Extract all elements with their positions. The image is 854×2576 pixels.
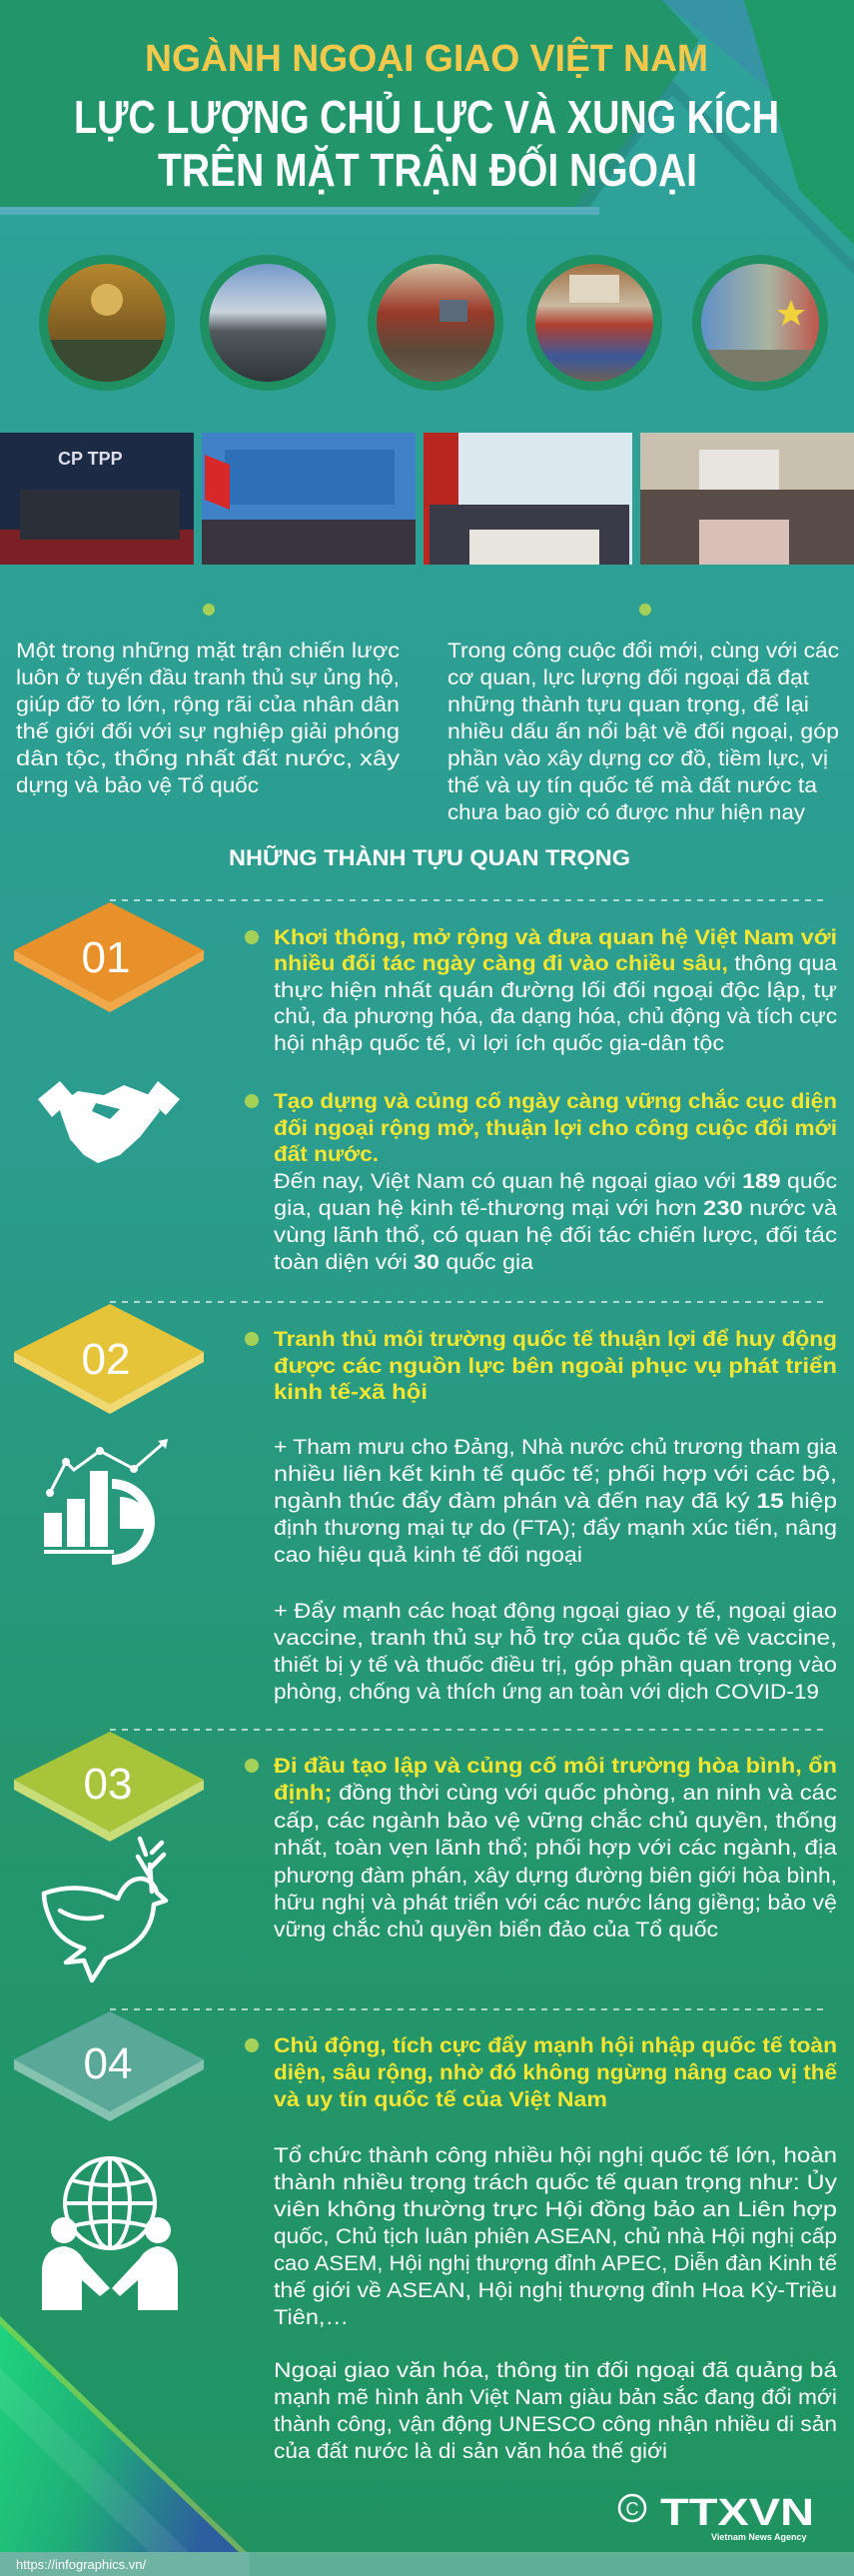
section 2 text: được các nguồn lực bên ngoài phục vụ phát triển	[274, 1355, 837, 1378]
icon: globe with people	[42, 2158, 178, 2310]
badge 01	[14, 902, 204, 1012]
section 1 text: nhiều đối tác ngày càng đi vào chiều sâu, thông qua	[274, 952, 837, 975]
section 1 text: Đến nay, Việt Nam có quan hệ ngoại giao với 189 quốc	[274, 1170, 837, 1193]
section 4 text: Chủ động, tích cực đẩy mạnh hội nhập quốc tế toàn	[274, 2034, 837, 2057]
section 2 text: kinh tế-xã hội	[274, 1381, 427, 1404]
section 3 text: nhất, toàn vẹn lãnh thổ; phối hợp với các ngành, địa	[274, 1837, 837, 1860]
section 1 text: thực hiện nhất quán đường lối đối ngoại độc lập, tự	[274, 979, 837, 1002]
section heading: NHỮNG THÀNH TỰU QUAN TRỌNG	[229, 845, 630, 870]
section 4 text: Tổ chức thành công nhiều hội nghị quốc tế lớn, hoàn	[274, 2144, 837, 2167]
section 4 text: Tiên,…	[274, 2306, 349, 2329]
section 2 text: phòng, chống và thích ứng an toàn với dịch COVID-19	[274, 1681, 819, 1704]
intro dots	[203, 604, 651, 616]
section 2 text: nhiều liên kết kinh tế quốc tế; phối hợp với các bộ,	[274, 1463, 837, 1486]
section 4 text	[245, 2034, 838, 2463]
section 4 text: thành công, vận động UNESCO công nhận nhiều di sản	[274, 2413, 837, 2436]
icon: chart	[44, 1439, 168, 1565]
section 1 text: gia, quan hệ kinh tế-thương mại với hơn 230 nước và	[274, 1197, 837, 1220]
section 1 text: hội nhập quốc tế, vì lợi ích quốc gia-dân tộc	[274, 1032, 724, 1055]
section 2 text: cao hiệu quả kinh tế đối ngoại	[274, 1544, 582, 1567]
section 1 text: Tạo dựng và củng cố ngày càng vững chắc cục diện	[274, 1089, 837, 1113]
section 3 text: phương đàm phán, xây dựng đường biên giới hòa bình,	[274, 1865, 837, 1888]
section 3 text: hữu nghị và phát triển với các nước láng giềng; bảo vệ	[274, 1892, 837, 1915]
section 3 text: vững chắc chủ quyền biển đảo của Tổ quốc	[274, 1919, 718, 1941]
section 3 text: định; đồng thời cùng với quốc phòng, an ninh và các	[274, 1782, 837, 1805]
footer url bar: https://infographics.vn/	[16, 2557, 146, 2572]
section 2 text: + Tham mưu cho Đảng, Nhà nước chủ trương tham gia	[274, 1436, 837, 1459]
section 1 text: chủ, đa phương hóa, đa dạng hóa, chủ động và tích cực	[274, 1005, 837, 1028]
intro right text: chưa bao giờ có được như hiện nay	[447, 801, 806, 824]
section 1 text: đối ngoại rộng mở, thuận lợi cho công cuộc đổi mới	[274, 1117, 837, 1140]
intro left text: giúp đỡ to lớn, rộng rãi của nhân dân	[16, 693, 400, 716]
section 4 text: cao ASEM, Hội nghị thượng đỉnh APEC, Diễn đàn Kinh tế	[274, 2252, 837, 2275]
section 2 text: ngành thúc đẩy đàm phán và đến nay đã ký 15 hiệp	[274, 1490, 837, 1513]
section 4 text: của đất nước là di sản văn hóa thế giới	[274, 2440, 667, 2463]
section 1 text	[245, 926, 837, 1274]
intro right text: Trong công cuộc đổi mới, cùng với các	[447, 640, 839, 662]
intro left text: Một trong những mặt trận chiến lược	[16, 640, 400, 662]
section 4 text: thế giới về ASEAN, Hội nghị thượng đỉnh Hoa Kỳ-Triều	[274, 2279, 837, 2302]
section 2 text	[245, 1328, 837, 1704]
section 4 text: quốc, Chủ tịch luân phiên ASEAN, chủ nhà Hội nghị cấp	[274, 2225, 837, 2248]
section 2 text: Tranh thủ môi trường quốc tế thuận lợi để huy động	[274, 1328, 837, 1351]
photo strip	[0, 433, 854, 565]
intro left text: dựng và bảo vệ Tổ quốc	[16, 774, 259, 797]
intro right text: những thành tựu quan trọng, để lại	[447, 693, 809, 716]
section 4 text: thành nhiều trọng trách quốc tế quan trọng như: Ủy	[274, 2170, 838, 2194]
section 4 text: và uy tín quốc tế của Việt Nam	[274, 2088, 607, 2111]
footer url bar	[0, 2552, 854, 2576]
intro right text	[447, 640, 839, 824]
header background	[0, 0, 854, 275]
logo: TTXVN: C	[625, 2499, 639, 2519]
badge 02: 02	[82, 1335, 130, 1384]
section 1 text: vùng lãnh thổ, có quan hệ đối tác chiến lược, đối tác	[274, 1224, 837, 1247]
intro right text: thế và uy tín quốc tế mà đất nước ta	[447, 774, 817, 797]
photo circles row	[39, 255, 839, 391]
section 2 text: thiết bị y tế và thuốc điều trị, góp phần quan trọng vào	[274, 1654, 837, 1677]
section 4 text: Ngoại giao văn hóa, thông tin đối ngoại đã quảng bá	[274, 2359, 837, 2382]
intro left text: dân tộc, thống nhất đất nước, xây	[16, 747, 401, 770]
badge 03	[14, 1732, 204, 1842]
section 1 text: đất nước.	[274, 1143, 379, 1166]
intro right text: nhiều dấu ấn nổi bật về đối ngoại, góp	[447, 720, 839, 743]
intro right text: cơ quan, lực lượng đối ngoại đã đạt	[447, 666, 809, 689]
section 1 text: Khơi thông, mở rộng và đưa quan hệ Việt Nam với	[274, 926, 837, 949]
photo strip: CP TPP	[58, 449, 123, 469]
intro left text: thế giới đối với sự nghiệp giải phóng	[16, 720, 400, 743]
badge 04	[14, 2011, 204, 2121]
logo: TTXVN: Vietnam News Agency	[711, 2532, 807, 2542]
section 2 text: + Đẩy mạnh các hoạt động ngoại giao y tế, ngoại giao	[274, 1600, 837, 1623]
section 3 text	[245, 1755, 837, 1941]
section 3 text: Đi đầu tạo lập và củng cố môi trường hòa bình, ổn	[274, 1755, 837, 1778]
section 3 text: cấp, các ngành bảo vệ vững chắc chủ quyền, thống	[274, 1810, 837, 1833]
section 2 text: định thương mại tự do (FTA); đẩy mạnh xúc tiến, nâng	[274, 1517, 837, 1540]
title: NGÀNH NGOẠI GIAO VIỆT NAM	[145, 36, 708, 80]
intro right text: phần vào xây dựng cơ đồ, tiềm lực, vị	[447, 747, 828, 770]
icon: dove	[44, 1839, 166, 1980]
title: TRÊN MẶT TRẬN ĐỐI NGOẠI	[158, 144, 697, 196]
badge 02	[14, 1304, 204, 1414]
logo: TTXVN: TTXVN	[660, 2492, 814, 2534]
icon: handshake	[38, 1081, 180, 1163]
section 4 text: diện, sâu rộng, nhờ đó không ngừng nâng cao vị thế	[274, 2061, 837, 2084]
badge 04: 04	[84, 2039, 132, 2088]
section 2 text: vaccine, tranh thủ sự hỗ trợ của quốc tế về vaccine,	[274, 1627, 837, 1650]
section 4 text: viên không thường trực Hội đồng bảo an Liên hợp	[274, 2198, 837, 2221]
title	[74, 36, 779, 196]
section 4 text: mạnh mẽ hình ảnh Việt Nam giàu bản sắc đang đổi mới	[274, 2386, 837, 2409]
badge 03: 03	[84, 1760, 132, 1809]
intro left text: luôn ở tuyến đầu tranh thủ sự ủng hộ,	[16, 666, 400, 689]
logo: TTXVN	[619, 2492, 814, 2542]
badge 01: 01	[82, 933, 130, 982]
intro left text	[16, 640, 401, 797]
bottom-left decorative triangle	[0, 2316, 248, 2553]
section 1 text: toàn diện với 30 quốc gia	[274, 1251, 533, 1274]
